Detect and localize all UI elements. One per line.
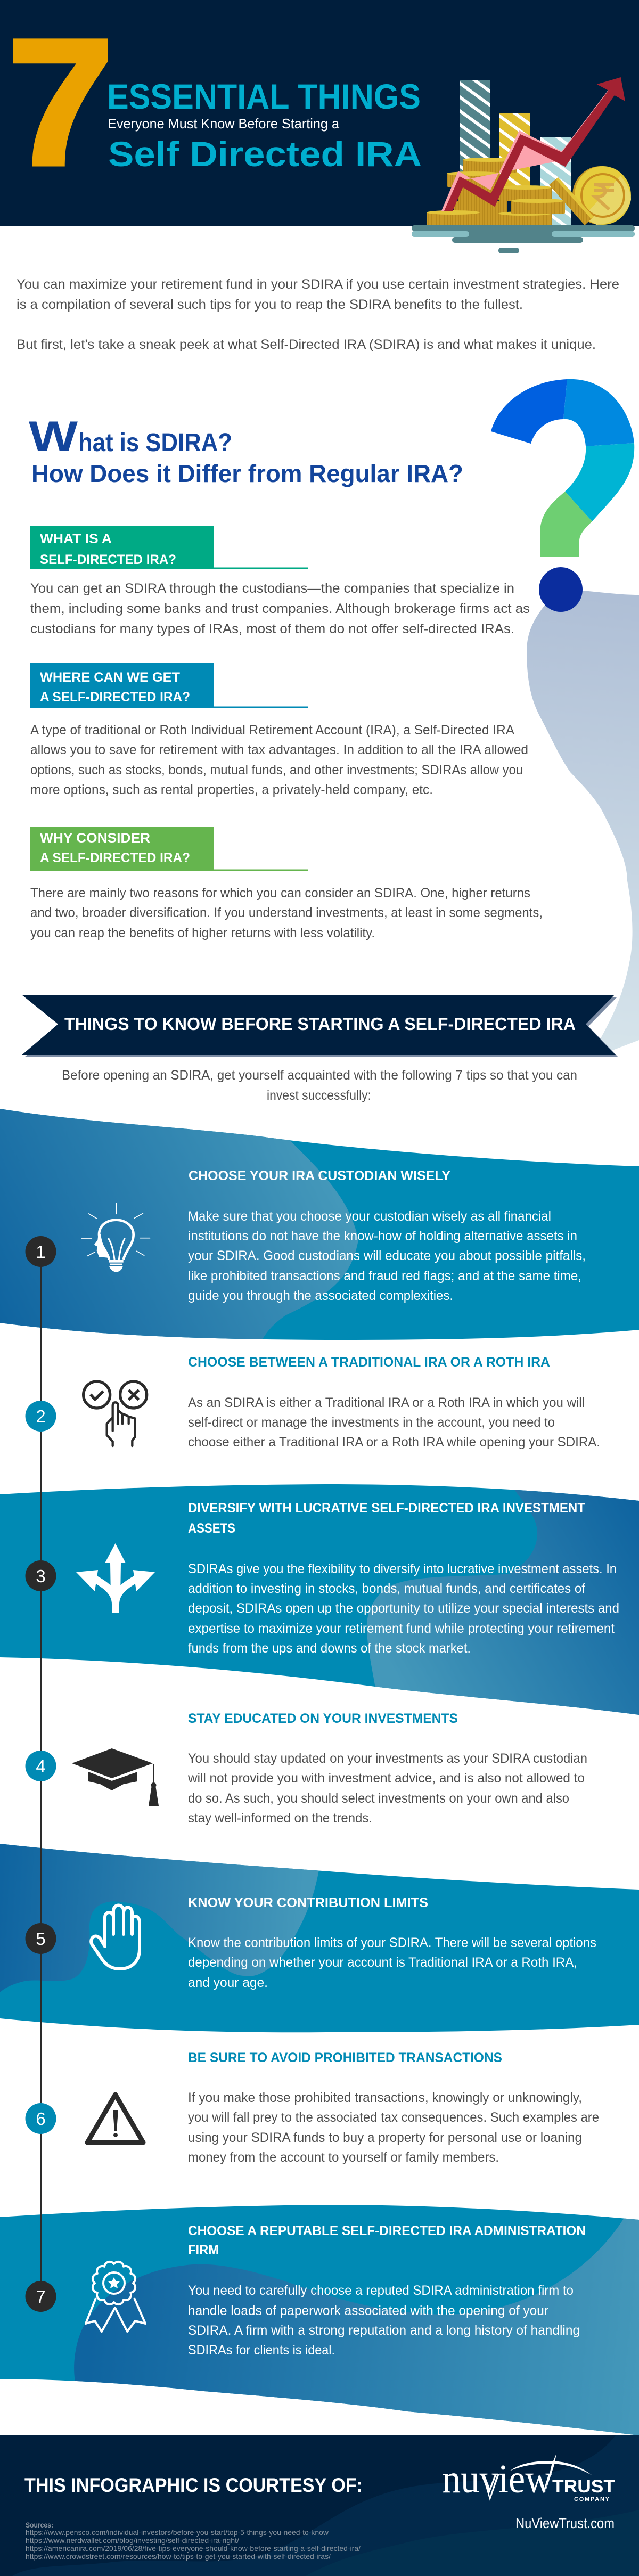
coin: rupee	[572, 166, 631, 225]
heading: KNOW YOUR CONTRIBUTION LIMITS	[188, 1895, 428, 1910]
body text	[187, 1751, 587, 1826]
body text	[188, 2090, 599, 2165]
sources: https://www.nerdwallet.com/blog/investing/self-directed-ira-right/	[26, 2536, 239, 2545]
icon: lightbulb with head	[81, 1203, 150, 1272]
platform	[412, 225, 635, 253]
heading: what is SDIRA: W	[29, 413, 78, 461]
icon: three arrows	[76, 1543, 155, 1613]
title: Everyone Must Know Before Starting a	[108, 116, 340, 132]
heading: what is SDIRA: How Does it Differ from Regular IRA?	[31, 460, 463, 487]
step number 2: 2	[36, 1406, 46, 1426]
step number 2	[26, 1401, 56, 1432]
heading: ASSETS	[188, 1521, 235, 1536]
text: answer 1: You can get an SDIRA through the custodians—the companies that specialize in	[30, 581, 514, 596]
panel: tip 7 background	[0, 2205, 639, 2450]
step number 7	[26, 2281, 56, 2312]
heading	[188, 1501, 585, 1536]
tip 1: custodian	[26, 1168, 586, 1303]
body text: funds from the ups and downs of the stock market.	[188, 1641, 471, 1656]
heading: CHOOSE YOUR IRA CUSTODIAN WISELY	[189, 1168, 450, 1183]
heading: CHOOSE BETWEEN A TRADITIONAL IRA OR A ROTH IRA	[188, 1355, 550, 1370]
icon: raised hand	[91, 1906, 140, 1969]
heading: what is SDIRA	[29, 413, 463, 487]
tip 2: traditional or roth	[26, 1355, 600, 1450]
text: answer 3: There are mainly two reasons for which you can consider an SDIRA. One, higher returns	[30, 886, 530, 901]
step number 5	[26, 1923, 56, 1954]
section banner: THINGS TO KNOW BEFORE STARTING A SELF-DIRECTED IRA	[64, 1014, 576, 1034]
text: answer 1: custodians for many types of IRAs, most of them do not offer self-directed IRAs.	[30, 621, 514, 636]
step number 7: 7	[36, 2287, 46, 2307]
body text	[188, 1561, 619, 1656]
body text: You should stay updated on your investments as your SDIRA custodian	[188, 1751, 587, 1766]
heading	[188, 2223, 586, 2258]
body text: SDIRA. A firm with a strong reputation and a long history of handling	[188, 2323, 580, 2338]
big numeral 7: 7	[7, 3, 114, 202]
step number 3: 3	[36, 1566, 46, 1586]
step number 6	[26, 2103, 56, 2134]
background blob: right side	[527, 590, 639, 1051]
step number 4: 4	[36, 1756, 46, 1776]
text: answer 3: and two, broader diversification. If you understand investments, at least in some segments,	[30, 905, 543, 920]
step number 4	[26, 1751, 56, 1781]
body text: institutions do not have the know-how of holding alternative assets in	[188, 1229, 577, 1244]
panel: where can we get a self-directed IRA: A SELF-DIRECTED IRA?	[40, 690, 190, 705]
step number 1: 1	[36, 1242, 46, 1262]
tip 5: contribution limits	[26, 1895, 596, 1990]
panel: why consider a self-directed IRA: A SELF-DIRECTED IRA?	[40, 851, 190, 865]
sources: https://americanira.com/2019/06/28/five-tips-everyone-should-know-before-starting-a-self-directed-ira/	[26, 2544, 361, 2553]
step number 1	[26, 1236, 56, 1267]
panel: what is a self-directed IRA	[30, 526, 530, 636]
text: answer 3	[30, 886, 543, 941]
panel: where can we get a self-directed IRA: WHERE CAN WE GET	[40, 670, 180, 685]
body text: will not provide you with investment advice, and is also not allowed to	[187, 1771, 585, 1786]
panel: why consider a self-directed IRA	[30, 827, 543, 941]
body text: depending on whether your account is Traditional IRA or a Roth IRA,	[188, 1955, 577, 1970]
tip 3: diversify	[26, 1501, 619, 1656]
text: answer 2: more options, such as rental properties, a privately-held company, etc.	[30, 782, 433, 797]
body text: self-direct or manage the investments in the account, you need to	[188, 1415, 555, 1430]
sources: https://www.pensco.com/individual-investors/before-you-start/top-5-things-you-need-to-know	[26, 2528, 329, 2537]
sources: Sources:	[26, 2521, 53, 2529]
title: Self Directed IRA	[108, 134, 422, 174]
body text: guide you through the associated complexities.	[188, 1288, 453, 1303]
section banner	[22, 995, 618, 1057]
timeline line	[40, 1252, 42, 2296]
step number 3	[26, 1560, 56, 1591]
body text	[188, 1395, 600, 1450]
logo: NuView Trust Company: nuview	[442, 2457, 552, 2501]
body text: and your age.	[188, 1975, 268, 1990]
step number 5: 5	[36, 1929, 46, 1949]
tip 4: stay educated	[26, 1711, 587, 1826]
text: answer 1	[30, 581, 530, 636]
text: answer 1: them, including some banks and trust companies. Although brokerage firms act as	[30, 601, 530, 616]
icon: question mark	[491, 379, 634, 612]
banner subtext: Before opening an SDIRA, get yourself acquainted with the following 7 tips so that you can	[62, 1068, 577, 1083]
body text: expertise to maximize your retirement fund while protecting your retirement	[188, 1621, 615, 1636]
intro text: But first, let’s take a sneak peek at what Self-Directed IRA (SDIRA) is and what makes it unique.	[17, 337, 596, 352]
body text	[188, 1935, 596, 1990]
title	[107, 77, 422, 174]
banner subtext: invest successfully:	[267, 1088, 371, 1103]
body text: Know the contribution limits of your SDIRA. There will be several options	[188, 1935, 596, 1950]
body text: using your SDIRA funds to buy a property for personal use or loaning	[188, 2130, 582, 2145]
coins	[427, 158, 565, 225]
panel: what is a self-directed IRA: WHAT IS A	[40, 531, 112, 546]
body text: If you make those prohibited transactions, knowingly or unknowingly,	[188, 2090, 582, 2105]
step number 6: 6	[36, 2109, 46, 2129]
body text: do so. As such, you should select investments on your own and also	[188, 1791, 569, 1806]
panel: what is a self-directed IRA: SELF-DIRECTED IRA?	[40, 552, 176, 567]
illustration: bar chart, coins and rising arrow	[412, 77, 635, 253]
text: answer 2: allows you to save for retirement with tax advantages. In addition to all the IRA allowed	[30, 742, 528, 757]
icon: graduation cap	[72, 1748, 159, 1806]
sources	[26, 2521, 361, 2561]
body text: you will fall prey to the associated tax consequences. Such examples are	[188, 2110, 599, 2125]
intro text	[17, 277, 619, 352]
intro text: is a compilation of several such tips for you to reap the SDIRA benefits to the fullest.	[17, 297, 523, 312]
body text: As an SDIRA is either a Traditional IRA or a Roth IRA in which you will	[188, 1395, 585, 1410]
title: ESSENTIAL THINGS	[107, 77, 421, 116]
panel: tip 5 background	[0, 1837, 639, 2032]
intro text: You can maximize your retirement fund in your SDIRA if you use certain investment strategies. Here	[17, 277, 619, 292]
body text: addition to investing in stocks, bonds, mutual funds, and certificates of	[188, 1581, 585, 1596]
text: answer 2: options, such as stocks, bonds, mutual funds, and other investments; SDIRAs allow you	[30, 763, 523, 778]
panel: where can we get a self-directed IRA	[30, 663, 528, 797]
heading: DIVERSIFY WITH LUCRATIVE SELF-DIRECTED IRA INVESTMENT	[188, 1501, 585, 1516]
icon: warning triangle	[87, 2095, 143, 2142]
body text: You need to carefully choose a reputed SDIRA administration firm to	[188, 2283, 574, 2298]
body text: your SDIRA. Good custodians will educate you about possible pitfalls,	[188, 1248, 586, 1263]
tip 7: reputable firm	[26, 2223, 586, 2358]
text: answer 2: A type of traditional or Roth Individual Retirement Account (IRA), a Self-Directed IRA	[30, 723, 514, 738]
panel: tip 3 background	[0, 1481, 639, 1720]
heading: FIRM	[188, 2243, 219, 2258]
heading: STAY EDUCATED ON YOUR INVESTMENTS	[188, 1711, 458, 1726]
body text	[188, 1209, 586, 1303]
body text	[188, 2283, 580, 2358]
footer band	[0, 2435, 639, 2576]
body text: deposit, SDIRAs open up the opportunity to utilize your special interests and	[188, 1601, 619, 1616]
logo: NuView Trust Company: COMPANY	[574, 2496, 610, 2503]
text: answer 2	[30, 723, 528, 797]
footer heading: THIS INFOGRAPHIC IS COURTESY OF:	[24, 2474, 363, 2496]
body text: SDIRAs give you the flexibility to diversify into lucrative investment assets. In	[188, 1561, 617, 1576]
heading: what is SDIRA: hat is SDIRA?	[78, 429, 232, 457]
icon: award ribbon	[86, 2262, 145, 2332]
body text: stay well-informed on the trends.	[188, 1811, 372, 1826]
rising arrow	[441, 89, 611, 211]
panel: why consider a self-directed IRA: WHY CONSIDER	[40, 831, 150, 846]
sources: https://www.crowdstreet.com/resources/how-to/tips-to-get-you-started-with-self-directed-iras/	[26, 2552, 331, 2561]
body text: money from the account to yourself or family members.	[188, 2150, 499, 2165]
tip 6: prohibited transactions	[26, 2050, 599, 2165]
website: NuViewTrust.com	[515, 2515, 615, 2531]
icon: choice hand	[84, 1381, 147, 1446]
body text: like prohibited transactions and fraud red flags; and at the same time,	[188, 1269, 581, 1283]
body text: Make sure that you choose your custodian wisely as all financial	[188, 1209, 551, 1224]
logo: NuView Trust Company: TRUST	[552, 2476, 615, 2497]
body text: SDIRAs for clients is ideal.	[188, 2343, 335, 2358]
body text: choose either a Traditional IRA or a Roth IRA while opening your SDIRA.	[188, 1435, 600, 1450]
logo: NuView Trust Company	[442, 2454, 615, 2503]
banner subtext	[62, 1068, 577, 1103]
text: answer 3: you can reap the benefits of higher returns with less volatility.	[30, 926, 375, 941]
body text: handle loads of paperwork associated with the opening of your	[188, 2303, 548, 2318]
heading: CHOOSE A REPUTABLE SELF-DIRECTED IRA ADMINISTRATION	[188, 2223, 586, 2238]
panel: tip 1 background	[0, 1102, 639, 1342]
header band	[0, 0, 639, 226]
heading: BE SURE TO AVOID PROHIBITED TRANSACTIONS	[188, 2050, 502, 2065]
